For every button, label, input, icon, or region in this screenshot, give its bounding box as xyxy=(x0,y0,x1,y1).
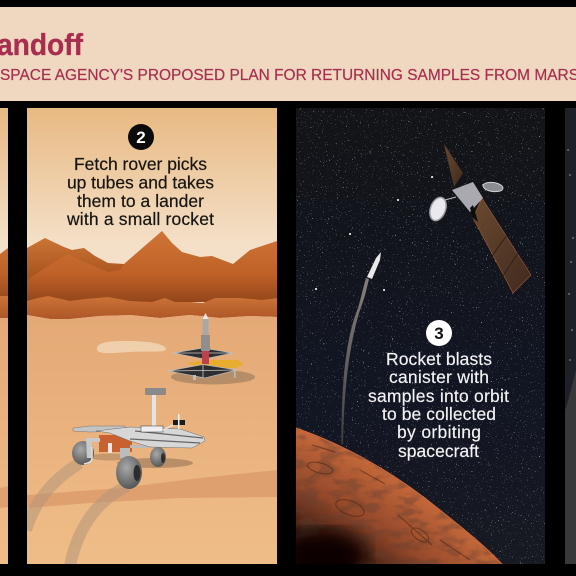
rover arm xyxy=(162,424,174,430)
rover tracks xyxy=(26,463,128,566)
rocket xyxy=(367,252,381,279)
rover solar decks xyxy=(73,426,127,432)
rover xyxy=(72,388,205,489)
rover front wheel xyxy=(116,456,142,489)
step 2 text: them to a lander xyxy=(77,191,204,211)
bright stars xyxy=(316,177,432,290)
panel 2: fetch rover xyxy=(26,108,277,566)
step 2 badge: 2 xyxy=(136,128,146,147)
step 3 text: samples into orbit xyxy=(368,386,509,406)
step 2 text xyxy=(66,154,214,229)
orbiter spacecraft xyxy=(427,144,531,293)
panel 3: orbit xyxy=(283,108,545,576)
step 3 text: to be collected xyxy=(382,404,496,424)
step 3 text xyxy=(368,349,509,461)
ground xyxy=(27,315,277,564)
rover body xyxy=(99,435,132,452)
panel 4 sliver xyxy=(565,108,576,564)
step 2 text: up tubes and takes xyxy=(67,172,214,192)
pale patch xyxy=(97,341,166,353)
step 2 badge xyxy=(128,124,154,150)
step 2 text: with a small rocket xyxy=(66,209,214,229)
panel 1 sliver xyxy=(0,108,8,564)
header band xyxy=(0,7,576,101)
step 3 text: spacecraft xyxy=(398,441,479,461)
rocket trail xyxy=(341,278,369,445)
space background xyxy=(296,108,545,564)
rover wheels rear xyxy=(150,447,166,467)
step 3 text: by orbiting xyxy=(397,422,481,442)
step 3 text: Rocket blasts xyxy=(386,349,492,369)
star noise xyxy=(296,108,545,564)
lander with rocket xyxy=(168,313,255,384)
mountains xyxy=(27,231,277,319)
step 3 badge xyxy=(426,320,452,346)
rover mast xyxy=(152,395,156,428)
dune band xyxy=(27,470,277,508)
sky xyxy=(27,108,277,320)
Mars surface xyxy=(296,428,502,564)
step 3 badge: 3 xyxy=(434,324,444,343)
step 3 text: canister with xyxy=(389,367,489,387)
step 2 text: Fetch rover picks xyxy=(74,154,207,174)
